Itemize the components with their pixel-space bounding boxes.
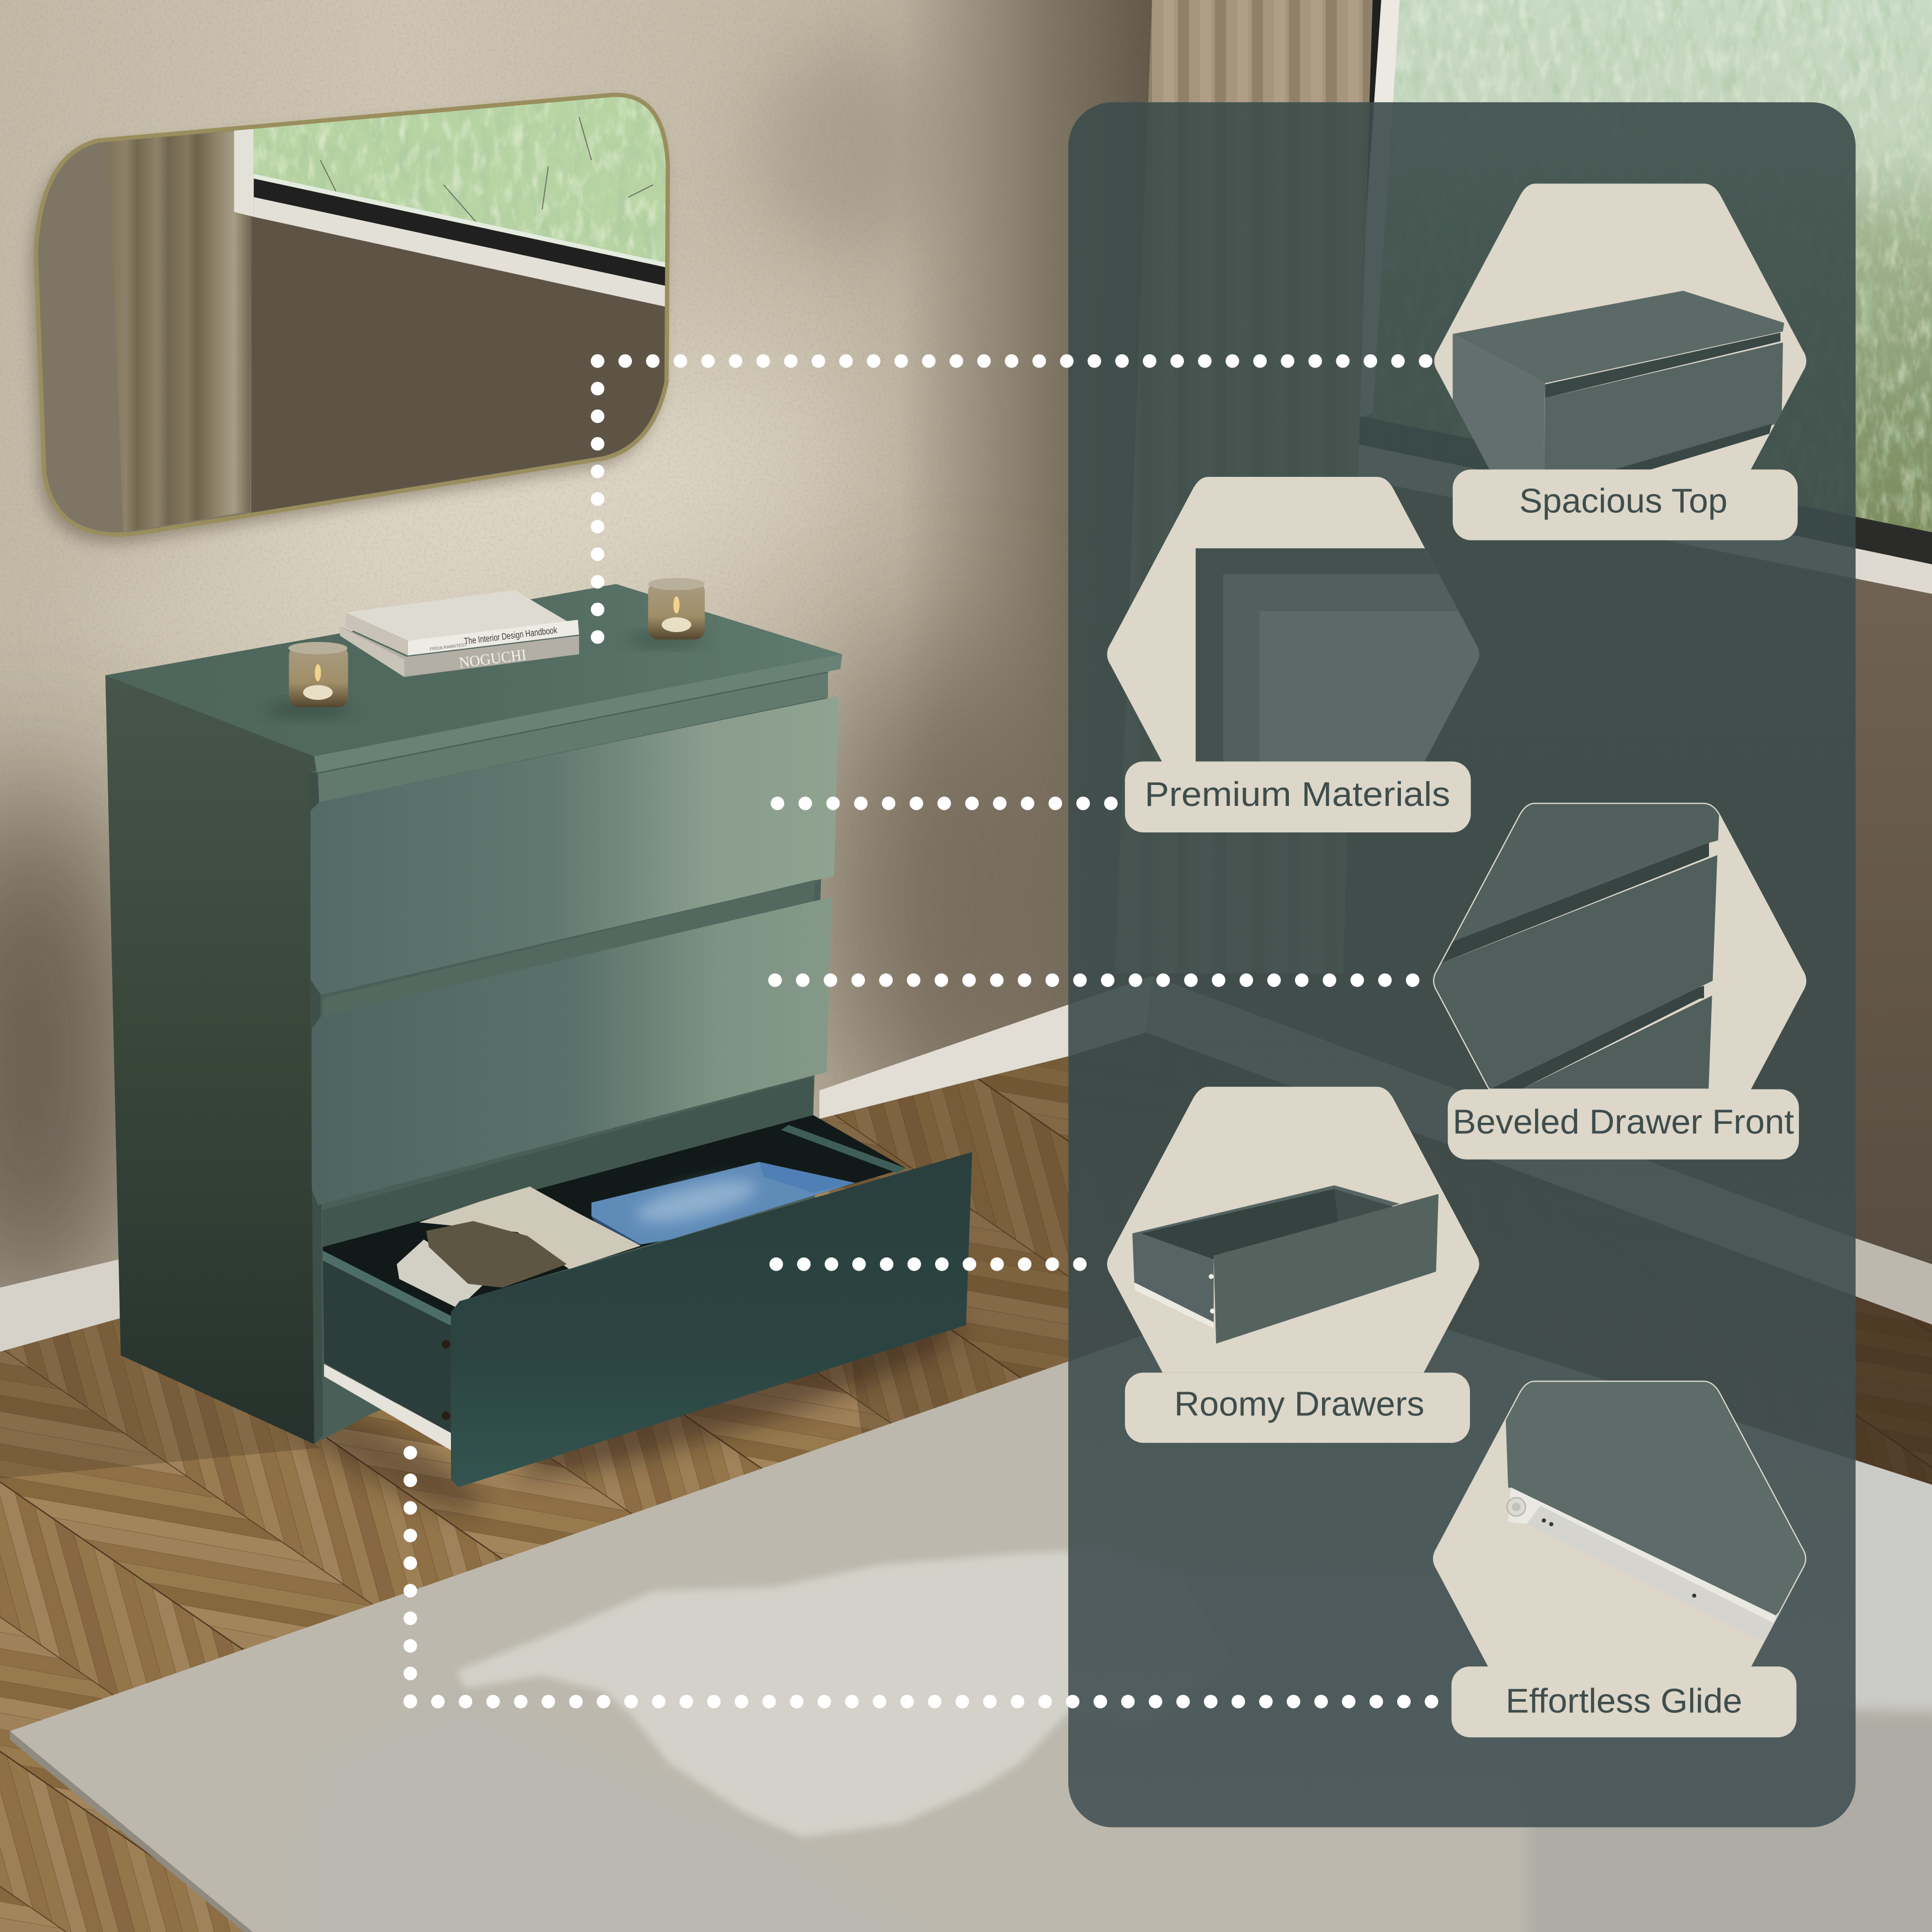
window sill white — [1337, 441, 1932, 594]
top drawer — [310, 696, 838, 995]
label: effortless glide: Effortless Glide — [1506, 1682, 1742, 1721]
clothes: olive sweater — [426, 1221, 567, 1288]
hexagon: spacious top — [1434, 184, 1806, 481]
dotted leader: roomy drawers — [776, 1261, 1083, 1267]
slide rail — [324, 1364, 451, 1450]
middle drawer — [312, 897, 832, 1205]
recess above open drawer — [323, 1077, 813, 1247]
label: effortless glide — [1451, 1666, 1796, 1737]
window frame post — [1341, 0, 1400, 425]
mirror reflection — [25, 74, 690, 554]
mirror gold frame — [36, 95, 668, 534]
clothes: beige shirt — [419, 1187, 641, 1269]
label: premium materials — [1125, 761, 1471, 832]
right wall — [1152, 419, 1932, 1269]
dresser top front edge — [314, 654, 842, 773]
label: roomy drawers: Roomy Drawers — [1174, 1385, 1424, 1424]
rug — [10, 1281, 1932, 1932]
dresser side — [105, 675, 317, 1444]
open drawer side rim — [323, 1251, 451, 1326]
window foliage — [1343, 0, 1932, 542]
gap between drawers — [323, 880, 816, 1019]
clothes: white fold — [397, 1240, 487, 1309]
floor — [0, 1033, 1932, 1932]
books: FRIDA RAMSTEDT — [429, 642, 468, 652]
baseboard left — [0, 1259, 120, 1352]
hexagon: premium materials — [1107, 477, 1519, 771]
baseboard right — [1146, 976, 1932, 1325]
label: spacious top — [1453, 469, 1798, 540]
panel: features — [1068, 102, 1856, 1827]
open drawer front — [451, 1152, 972, 1487]
curtain — [1115, 0, 1373, 973]
dotted leader: effortless glide — [410, 1453, 1434, 1704]
dresser top surface — [105, 584, 842, 757]
hexagon: effortless glide — [1434, 1368, 1836, 1667]
hexagon: beveled drawer front — [1417, 789, 1806, 1089]
open drawer interior — [323, 1115, 906, 1325]
books — [339, 590, 579, 677]
mirror — [25, 74, 690, 554]
feature: effortless glide — [1434, 1368, 1836, 1737]
books: NOGUCHI — [458, 646, 527, 672]
label: beveled drawer front: Beveled Drawer Front — [1453, 1103, 1794, 1142]
window sill dark — [1343, 413, 1932, 564]
feature: premium materials — [1107, 477, 1519, 832]
back wall — [0, 0, 1158, 1368]
dotted leader: spacious top — [598, 361, 1429, 639]
dotted leader: premium materials — [777, 800, 1114, 806]
frame left stile — [308, 771, 323, 1444]
hexagon: roomy drawers — [1107, 1087, 1479, 1373]
clothes: jeans — [591, 1162, 855, 1244]
baseboard middle — [819, 976, 1152, 1119]
recess under top — [318, 673, 828, 802]
floor shade — [0, 1033, 1932, 1530]
books: The Interior Design Handbook — [464, 625, 558, 646]
open drawer side — [323, 1259, 451, 1433]
feature: spacious top — [1434, 184, 1806, 540]
dresser front frame — [310, 672, 828, 1444]
label: roomy drawers — [1125, 1373, 1470, 1443]
feature: roomy drawers — [1107, 1087, 1479, 1443]
label: spacious top: Spacious Top — [1519, 482, 1727, 521]
screws — [442, 1340, 450, 1420]
label: beveled drawer front — [1448, 1089, 1799, 1159]
label: premium materials: Premium Materials — [1145, 775, 1450, 814]
dotted leader: beveled drawer front — [775, 977, 1416, 983]
feature: beveled drawer front — [1417, 789, 1806, 1159]
dresser — [105, 578, 972, 1487]
candle right — [626, 578, 705, 646]
open drawer back rim — [781, 1125, 906, 1173]
candle left — [265, 642, 351, 717]
